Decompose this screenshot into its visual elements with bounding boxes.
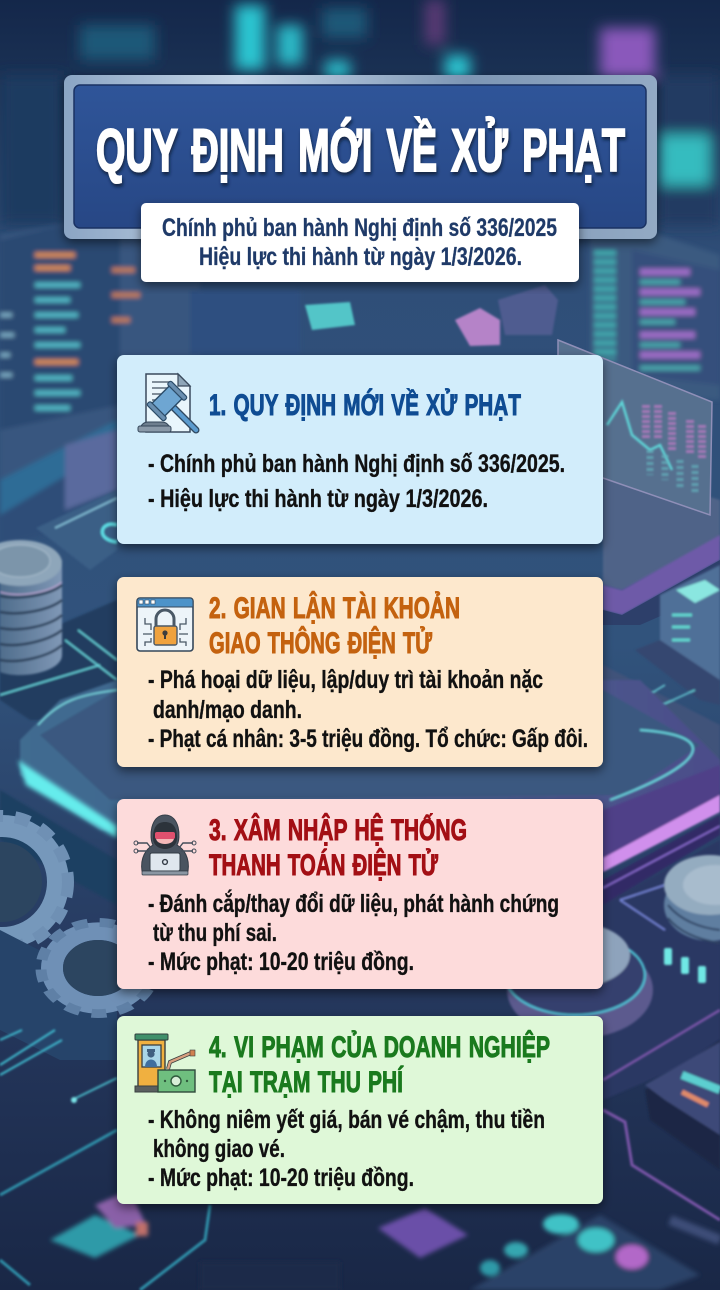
right box [603, 565, 720, 770]
panel: card 4 [117, 1016, 603, 1204]
body text: - Mức phạt: 10-20 triệu đồng. [148, 1164, 414, 1192]
panel: card 3 [117, 799, 603, 989]
middle blocks [305, 285, 558, 346]
coins right [505, 855, 720, 1038]
body text: không giao vé. [153, 1135, 285, 1163]
body text: - Đánh cắp/thay đổi dữ liệu, phát hành chứng [148, 888, 559, 918]
heading [209, 813, 467, 882]
body text [148, 1106, 545, 1192]
heading: 4. VI PHẠM CỦA DOANH NGHIỆP [209, 1030, 550, 1064]
heading: GIAO THÔNG ĐIỆN TỬ [209, 626, 432, 660]
gears [0, 816, 155, 1060]
heading: 3. XÂM NHẬP HỆ THỐNG [209, 813, 467, 847]
heading: 1. QUY ĐỊNH MỚI VỀ XỬ PHẠT [209, 388, 521, 422]
header inner blue plate [74, 85, 646, 228]
panel: card 1 [117, 355, 603, 544]
body text: - Phạt cá nhân: 3-5 triệu đồng. Tổ chức: Gấp đôi. [148, 725, 588, 753]
body text: - Không niêm yết giá, bán vé chậm, thu tiền [148, 1106, 545, 1134]
body text: - Mức phạt: 10-20 triệu đồng. [148, 948, 414, 976]
heading: TẠI TRẠM THU PHÍ [209, 1065, 404, 1099]
subtitle box: Chính phủ ban hành Nghị định số 336/2025 [162, 214, 557, 242]
body text [148, 450, 565, 513]
icon: hacker with laptop [134, 815, 196, 875]
subtitle box: Hiệu lực thi hành từ ngày 1/3/2026. [199, 243, 522, 271]
header frame [64, 75, 657, 239]
blurred top lights [0, 0, 720, 225]
heading [209, 591, 460, 660]
body text [148, 666, 588, 753]
heading [209, 1030, 550, 1099]
subtitle box [141, 203, 579, 282]
icon: browser padlock [137, 598, 193, 651]
body text [148, 888, 559, 976]
heading: 2. GIAN LẬN TÀI KHOẢN [209, 591, 460, 625]
central platform [20, 680, 720, 860]
right device [645, 1040, 720, 1170]
body text: từ thu phí sai. [153, 919, 277, 947]
coins left [0, 540, 62, 675]
bottom blurred blocks [50, 1190, 720, 1290]
icon: gavel and document [138, 374, 196, 432]
right monitor [590, 222, 720, 400]
neon right strips [603, 765, 720, 1100]
body text: - Chính phủ ban hành Nghị định số 336/2025. [148, 450, 565, 478]
mid-left platform [0, 490, 117, 720]
header panel [64, 75, 657, 282]
body text: - Phá hoại dữ liệu, lập/duy trì tài khoản nặc [148, 666, 543, 694]
icon: toll booth and cash [135, 1034, 195, 1092]
circuit lines [0, 1010, 720, 1290]
panel: card 2 [117, 577, 603, 767]
body text: - Hiệu lực thi hành từ ngày 1/3/2026. [148, 485, 488, 513]
right platform and chart panel [558, 340, 720, 625]
body text: danh/mạo danh. [153, 696, 302, 724]
left monitor [0, 222, 300, 545]
heading: THANH TOÁN ĐIỆN TỬ [209, 848, 438, 882]
